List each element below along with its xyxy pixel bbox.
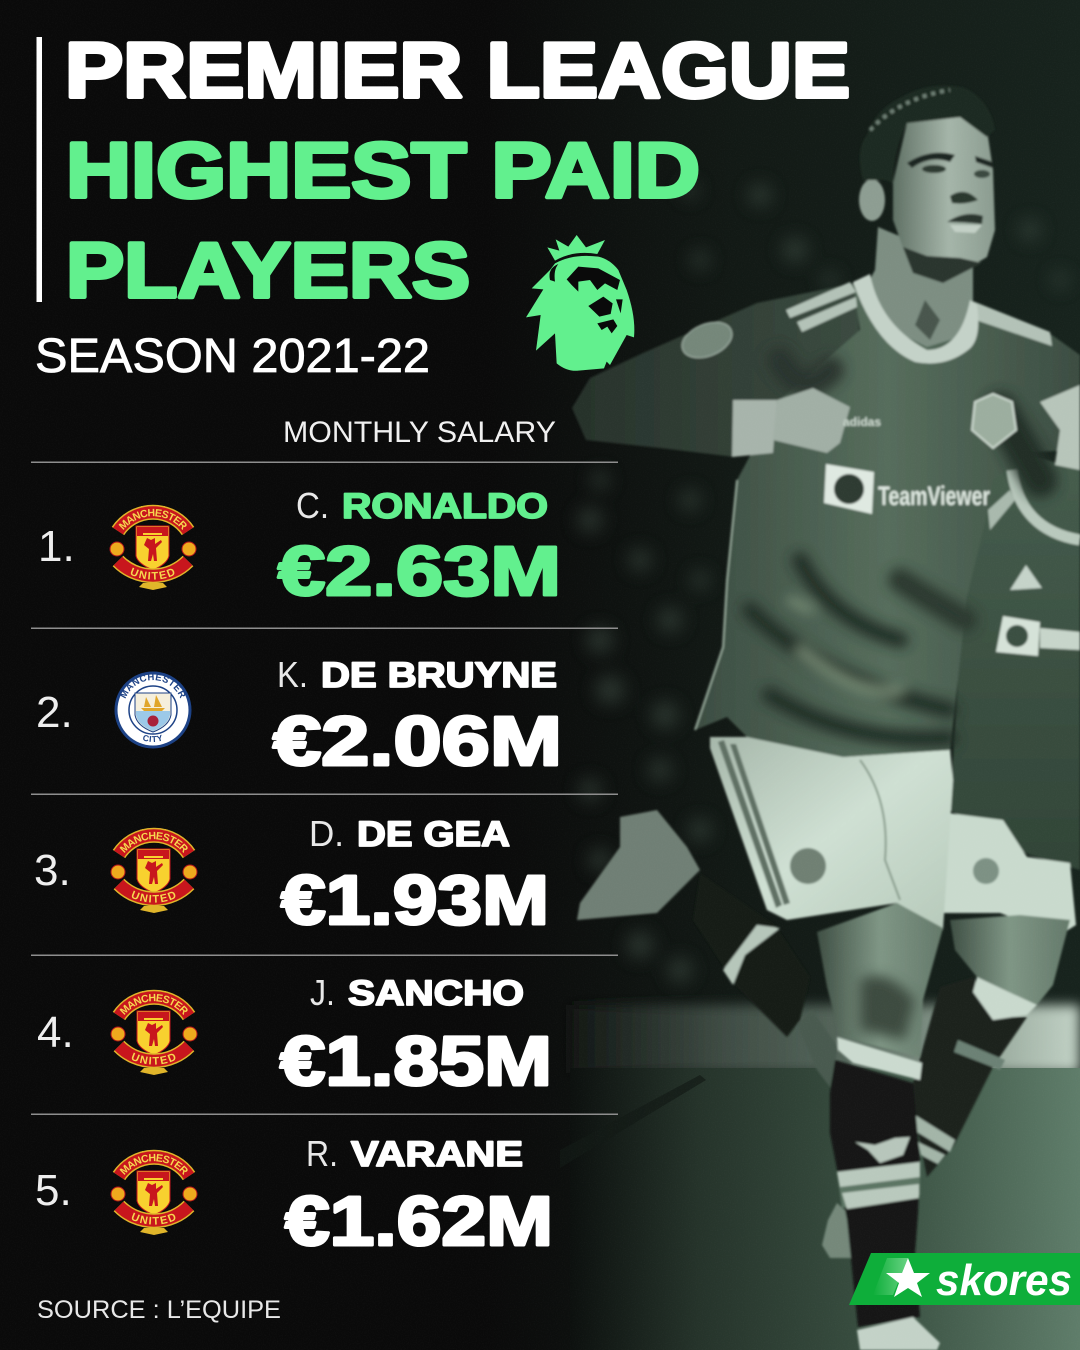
sock fold (837, 1037, 922, 1080)
shoulder stripes (786, 282, 1052, 346)
fist (773, 388, 850, 453)
photo: footballer celebrating (572, 86, 1080, 1350)
rank 5: 5. (35, 1166, 72, 1215)
logo: skores: skores (936, 1256, 1072, 1305)
crest: Manchester United: MANCHESTER (120, 832, 188, 854)
row: 4 Sancho (31, 954, 618, 1100)
crest: Manchester United: UNITED (130, 568, 174, 580)
surname: VARANE (351, 1135, 523, 1174)
source note: SOURCE : L’EQUIPE (37, 1296, 281, 1324)
crest: Manchester City: CITY (143, 734, 162, 742)
salary value: €1.85M (280, 1022, 552, 1100)
title: premier league: PREMIER LEAGUE (65, 26, 850, 114)
logo: skores (849, 1253, 1080, 1305)
ear (859, 179, 885, 221)
sock (830, 1060, 920, 1327)
hair (860, 86, 995, 183)
cuff (732, 400, 777, 457)
row: 1 Ronaldo (31, 462, 618, 610)
sleeve / arm (572, 283, 860, 457)
sponsor logo (824, 464, 874, 514)
surname: SANCHO (348, 974, 524, 1013)
crest: Manchester United: UNITED (132, 1212, 176, 1225)
crest: Manchester United: UNITED (132, 890, 176, 903)
jaw shadow (903, 247, 982, 283)
crest: Manchester United (110, 504, 196, 590)
title accent bar (36, 37, 42, 302)
row: 5 Varane (31, 1114, 618, 1260)
back leg and boot (577, 810, 838, 1087)
adidas mark: adidas (843, 415, 881, 429)
player name: J. (310, 972, 335, 1013)
facial features (907, 153, 993, 233)
title: highest paid: HIGHEST PAID (66, 126, 700, 214)
front leg (817, 903, 943, 1057)
salary value: €1.62M (285, 1182, 553, 1260)
shirt torso (695, 283, 1080, 757)
sock stripes (837, 1162, 920, 1208)
crest: Manchester City (114, 672, 192, 748)
left shirt edge highlight (695, 480, 737, 730)
rank 4: 4. (37, 1008, 74, 1057)
salary value: €2.06M (273, 702, 562, 780)
club badge (972, 394, 1016, 448)
salary value: €1.93M (281, 861, 549, 939)
collar (853, 274, 978, 364)
player name: K. (277, 654, 308, 695)
crest: Manchester United: MANCHESTER (120, 994, 188, 1016)
sponsor text: TeamViewer (878, 481, 990, 511)
shorts (710, 737, 953, 930)
sock badge (855, 1137, 910, 1163)
crest: Manchester United: UNITED (132, 1052, 176, 1065)
second player behind (913, 455, 1080, 1177)
surname: DE GEA (357, 815, 510, 854)
rank 3: 3. (34, 846, 71, 895)
right hand (1040, 385, 1080, 470)
rank 1: 1. (38, 522, 75, 571)
subtitle: season: SEASON 2021-22 (35, 330, 430, 383)
crest: Manchester United: MANCHESTER (120, 1154, 188, 1176)
surname: RONALDO (342, 487, 548, 526)
crest: Manchester United (110, 1150, 198, 1235)
crest: Manchester United (110, 990, 198, 1075)
crest: Manchester United: MANCHESTER (118, 508, 187, 530)
crest: Manchester United (110, 828, 198, 913)
player name: C. (296, 485, 329, 526)
row: 2 De Bruyne (31, 628, 618, 780)
column heading: monthly salary: MONTHLY SALARY (283, 416, 556, 449)
crest: Manchester City: MANCHESTER (120, 674, 186, 698)
league sleeve patch (677, 315, 737, 365)
icon: premier league lion (526, 235, 634, 371)
back foot behind standing leg (822, 1203, 862, 1258)
shirt folds (750, 360, 1040, 739)
neck (868, 227, 973, 347)
face (893, 117, 995, 283)
rank 2: 2. (36, 688, 73, 737)
salary value: €2.63M (278, 532, 561, 610)
row: 3 De Gea (31, 794, 618, 939)
player name: D. (309, 813, 344, 854)
player name: R. (306, 1133, 338, 1174)
title: players: PLAYERS (66, 226, 470, 314)
surname: DE BRUYNE (321, 656, 557, 695)
boot (857, 1317, 940, 1350)
